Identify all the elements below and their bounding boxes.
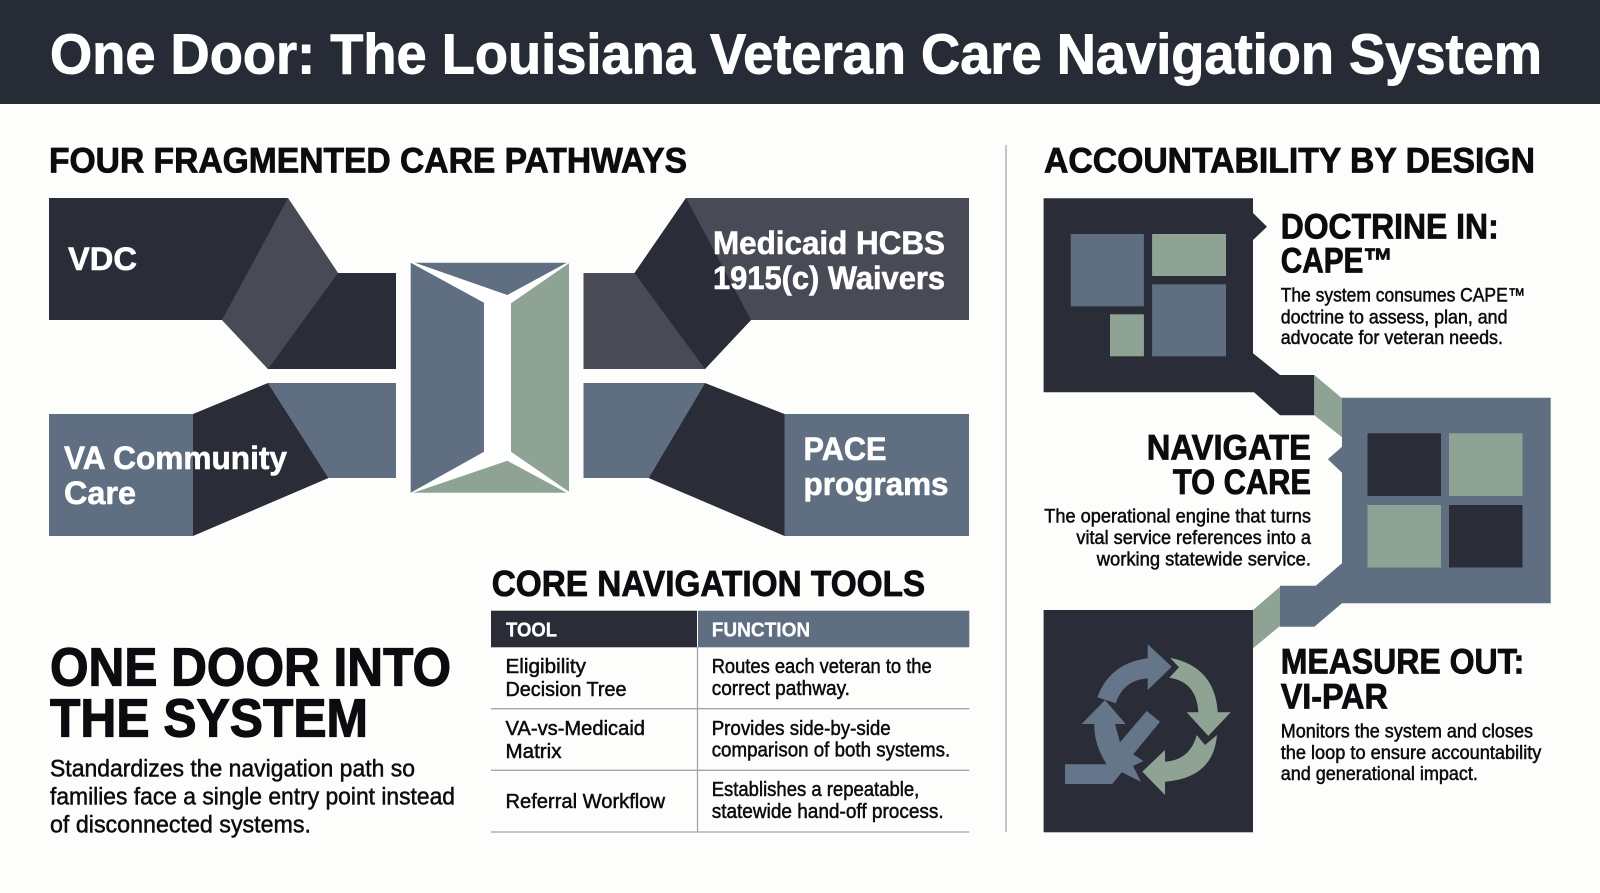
text block: measure out: the loop to ensure accountability [1281, 743, 1542, 764]
pathway: VA Community Care: VA Community [64, 440, 287, 476]
headline: one door into the system: ONE DOOR INTO [50, 638, 451, 698]
text block: measure out: MEASURE OUT: [1281, 642, 1524, 681]
pathway: VDC [49, 198, 396, 369]
table header labels: FUNCTION [712, 619, 810, 642]
row: eligibility decision tree: Routes each veteran to the [712, 655, 932, 678]
title banner: One Door: The Louisiana Veteran Care Navigation System [50, 22, 1542, 86]
panel: navigate icon block [1280, 398, 1551, 627]
panel: measure out icon block [1044, 610, 1253, 832]
text block: doctrine in: The system consumes CAPE™ [1281, 286, 1525, 307]
heading: accountability by design: ACCOUNTABILITY BY DESIGN [1044, 142, 1535, 180]
text block: doctrine in [1281, 207, 1525, 349]
row: eligibility decision tree: Eligibility [506, 655, 587, 678]
text block: one door description [50, 756, 455, 838]
pathway: PACE programs [584, 383, 969, 536]
row: referral workflow: Referral Workflow [506, 790, 665, 813]
text block: doctrine in: DOCTRINE IN: [1281, 207, 1499, 246]
table header labels [506, 619, 810, 642]
panel: doctrine in icon block [1044, 198, 1314, 415]
text block: navigate to care: working statewide service. [1096, 550, 1311, 571]
row: VA-vs-Medicaid matrix: Matrix [506, 740, 562, 763]
pathway: VA Community Care [49, 383, 396, 536]
row: VA-vs-Medicaid matrix: VA-vs-Medicaid [506, 717, 645, 740]
pathway: Medicaid HCBS 1915(c) Waivers: Medicaid HCBS [713, 225, 945, 261]
row: eligibility decision tree: correct pathway. [712, 677, 850, 700]
text block: one door description: families face a single entry point instead [50, 783, 455, 810]
text block: measure out [1281, 642, 1542, 785]
text block: navigate to care [1044, 428, 1311, 571]
table: core navigation tools [491, 610, 969, 832]
pathway: VDC: VDC [68, 241, 137, 277]
table header labels: TOOL [506, 619, 557, 642]
text block: measure out: VI-PAR [1281, 677, 1388, 716]
text block: doctrine in: CAPE™ [1281, 241, 1393, 280]
icon: central door [411, 263, 569, 493]
pathway: PACE programs: PACE [804, 431, 886, 467]
text block: measure out: Monitors the system and closes [1281, 722, 1533, 743]
connector: navigate to measure [1253, 587, 1280, 648]
title banner [0, 0, 1600, 104]
row: VA-vs-Medicaid matrix [506, 717, 950, 763]
text block: one door description: Standardizes the navigation path so [50, 756, 415, 783]
row: referral workflow: statewide hand-off process. [712, 800, 944, 823]
connector: doctrine to navigate [1314, 375, 1342, 437]
row: eligibility decision tree [506, 655, 932, 701]
row: referral workflow [506, 778, 944, 823]
headline: one door into the system: THE SYSTEM [50, 688, 368, 748]
row: referral workflow: Establishes a repeatable, [712, 778, 919, 801]
text block: navigate to care: NAVIGATE [1147, 428, 1311, 467]
pathway: PACE programs: programs [804, 466, 948, 502]
text block: one door description: of disconnected systems. [50, 811, 311, 838]
headline: one door into the system [50, 638, 451, 748]
pathway: Medicaid HCBS 1915(c) Waivers [584, 198, 969, 369]
text block: navigate to care: The operational engine that turns [1044, 507, 1311, 528]
heading: core navigation tools: CORE NAVIGATION TOOLS [492, 563, 925, 604]
row: VA-vs-Medicaid matrix: Provides side-by-side [712, 717, 891, 740]
text block: navigate to care: TO CARE [1173, 463, 1311, 502]
text block: measure out: and generational impact. [1281, 764, 1478, 785]
text block: doctrine in: advocate for veteran needs. [1281, 328, 1503, 349]
icon: feedback loop arrows [1065, 644, 1231, 795]
text block: doctrine in: doctrine to assess, plan, and [1281, 307, 1508, 328]
heading: four fragmented care pathways: FOUR FRAGMENTED CARE PATHWAYS [49, 142, 687, 180]
row: eligibility decision tree: Decision Tree [506, 678, 626, 701]
text block: navigate to care: vital service references into a [1076, 528, 1311, 549]
pathway: Medicaid HCBS 1915(c) Waivers: 1915(c) Waivers [713, 260, 945, 296]
pathway: VA Community Care: Care [64, 475, 136, 511]
row: VA-vs-Medicaid matrix: comparison of both systems. [712, 739, 950, 762]
